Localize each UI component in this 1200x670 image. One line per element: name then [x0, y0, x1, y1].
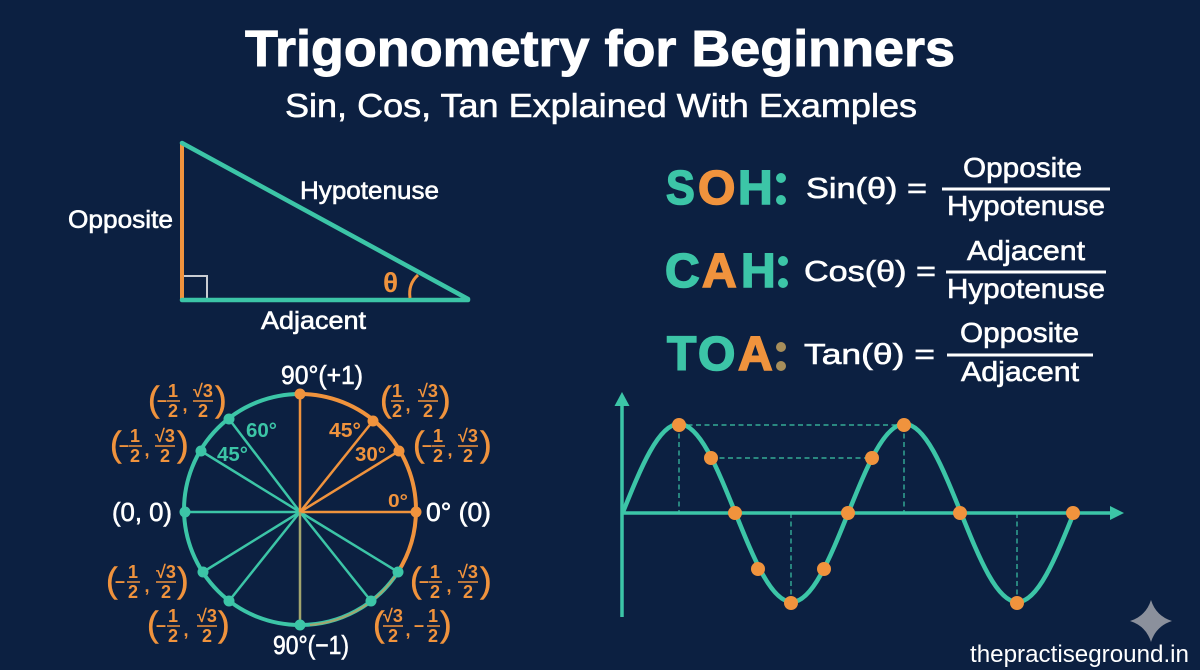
- TOA mnemonic: [667, 328, 786, 381]
- coordinate lower right outer: (: [373, 605, 385, 644]
- teal spokes: [185, 419, 398, 601]
- teal dots: [180, 414, 404, 630]
- coordinate lower left outer: 2: [202, 626, 212, 646]
- hypotenuse label: Hypotenuse: [300, 177, 439, 205]
- coordinate lower left outer: 1: [168, 606, 178, 626]
- coordinate upper left inner: –: [119, 435, 129, 455]
- coordinate upper right outer: 1: [392, 381, 402, 401]
- coordinate lower right outer: √3: [383, 606, 403, 626]
- coordinate lower left outer: –: [156, 615, 166, 635]
- TOA mnemonic: T: [667, 328, 696, 381]
- coordinate lower left inner: √3: [156, 562, 176, 582]
- teal circle arc: [184, 394, 398, 625]
- orange dots: [294, 388, 422, 518]
- SOH mnemonic: H: [738, 162, 773, 215]
- CAH mnemonic: C: [665, 245, 700, 298]
- SOH mnemonic: O: [698, 162, 735, 215]
- subtitle: Sin, Cos, Tan Explained With Examples: [285, 87, 917, 124]
- coordinate lower right outer: 2: [428, 626, 438, 646]
- cosine denominator: Hypotenuse: [947, 273, 1105, 304]
- coordinate lower right inner: ,: [446, 576, 452, 596]
- coordinate lower left inner: [106, 561, 189, 602]
- coordinate upper left inner: ): [177, 425, 189, 464]
- horizontal axis arrow: [1110, 506, 1124, 520]
- sine numerator: Opposite: [963, 152, 1082, 183]
- coordinate lower right outer: [373, 605, 452, 646]
- coordinate lower right outer: 2: [388, 626, 398, 646]
- coordinate lower left outer: (: [147, 605, 159, 644]
- top label: 90°(+1): [281, 360, 363, 390]
- vertical axis arrow: [614, 392, 630, 406]
- sine denominator: Hypotenuse: [947, 190, 1105, 221]
- coordinate upper right inner: ,: [447, 440, 453, 460]
- left label: (0, 0): [112, 497, 172, 527]
- coordinate lower left inner: 1: [128, 562, 138, 582]
- coordinate upper right outer: [380, 380, 451, 421]
- coordinate upper right inner: (: [413, 425, 425, 464]
- coordinate upper left inner: ,: [144, 440, 150, 460]
- tangent numerator: Opposite: [960, 317, 1079, 348]
- sine expression: Sin(θ) =: [806, 173, 927, 205]
- coordinate upper left outer: 2: [198, 401, 208, 421]
- cosine fraction bar: [946, 270, 1106, 274]
- coordinate upper right inner: √3: [458, 426, 478, 446]
- cosine numerator: Adjacent: [967, 235, 1085, 266]
- cosine expression: Cos(θ) =: [804, 256, 936, 288]
- bottom label: 90°(−1): [273, 630, 349, 660]
- SOH mnemonic: [666, 161, 786, 215]
- coordinate lower right inner: (: [410, 561, 422, 600]
- hypotenuse side: [182, 143, 468, 299]
- tangent expression: Tan(θ) =: [804, 339, 935, 371]
- coordinate lower left outer: 2: [168, 626, 178, 646]
- angle 60 teal: 60°: [246, 420, 277, 442]
- TOA mnemonic: A: [738, 328, 773, 381]
- coordinate lower left inner: –: [115, 571, 125, 591]
- panel: SOH formula: [666, 152, 1110, 221]
- coordinate lower left outer: [147, 605, 230, 646]
- adjacent label: Adjacent: [261, 307, 366, 335]
- icon: sparkle: [1130, 600, 1172, 642]
- coordinate upper left outer: 2: [168, 401, 178, 421]
- coordinate upper right outer: ): [439, 380, 451, 419]
- coordinate upper right outer: ,: [405, 395, 411, 415]
- vertical axis: [620, 400, 624, 617]
- coordinate lower right inner: √3: [458, 562, 478, 582]
- curve points: [672, 418, 1080, 610]
- coordinate upper right outer: √3: [418, 381, 438, 401]
- coordinate lower right inner: 1: [430, 562, 440, 582]
- CAH mnemonic: A: [702, 245, 737, 298]
- coordinate upper right outer: 2: [423, 401, 433, 421]
- coordinate lower right outer: ,: [405, 620, 411, 640]
- adjacent side: [182, 298, 468, 302]
- coordinate upper left outer: 1: [168, 381, 178, 401]
- opposite side: [180, 143, 184, 300]
- horizontal axis: [622, 511, 1115, 515]
- coordinate lower right inner: 2: [430, 582, 440, 602]
- coordinate lower right inner: 2: [463, 582, 473, 602]
- chart: sine wave: [614, 392, 1124, 617]
- coordinate upper right inner: 2: [433, 446, 443, 466]
- coordinate lower right outer: 1: [428, 606, 438, 626]
- coordinate lower left outer: √3: [197, 606, 217, 626]
- coordinate lower left inner: ): [177, 561, 189, 600]
- panel: TOA formula: [667, 317, 1093, 387]
- CAH mnemonic: [665, 245, 788, 298]
- coordinate lower left inner: 2: [128, 582, 138, 602]
- CAH mnemonic: H: [741, 245, 776, 298]
- coordinate upper right inner: –: [422, 435, 432, 455]
- right label: 0° (0): [426, 497, 491, 527]
- coordinate upper right outer: (: [380, 380, 392, 419]
- mixed lower arc: [310, 572, 398, 625]
- theta label: θ: [383, 267, 398, 298]
- panel: right triangle: [68, 143, 468, 335]
- angle 0 orange: 0°: [388, 491, 408, 511]
- panel: CAH formula: [665, 235, 1106, 304]
- coordinate upper left inner: √3: [155, 426, 175, 446]
- tangent fraction bar: [947, 354, 1093, 356]
- coordinate upper left inner: 1: [130, 426, 140, 446]
- coordinate lower right inner: –: [419, 571, 429, 591]
- coordinate lower left inner: 2: [161, 582, 171, 602]
- tangent denominator: Adjacent: [961, 356, 1079, 387]
- coordinate lower left inner: (: [106, 561, 118, 600]
- coordinate lower left outer: ): [218, 605, 230, 644]
- coordinate lower right outer: –: [414, 615, 424, 635]
- coordinate upper right inner: 2: [463, 446, 473, 466]
- orange spokes: [300, 394, 416, 512]
- coordinate lower left outer: ,: [183, 620, 189, 640]
- SOH mnemonic: S: [666, 161, 695, 215]
- coordinate upper left outer: ,: [182, 395, 188, 415]
- coordinate lower right outer: ): [440, 605, 452, 644]
- angle 30 orange: 30°: [355, 444, 386, 466]
- chart: unit circle: [106, 360, 492, 660]
- coordinate upper left outer: (: [148, 380, 160, 419]
- angle arc: [410, 275, 418, 298]
- sine curve: [623, 424, 1074, 602]
- title: Trigonometry for Beginners: [245, 20, 955, 77]
- coordinate upper right inner: 1: [433, 426, 443, 446]
- coordinate upper left outer: ): [215, 380, 227, 419]
- guide lines: [679, 425, 1017, 603]
- coordinate upper left inner: 2: [160, 446, 170, 466]
- coordinate upper right outer: 2: [392, 401, 402, 421]
- angle 45 teal: 45°: [217, 444, 248, 466]
- lower vertical spoke: [299, 512, 301, 625]
- right angle marker: [183, 276, 207, 300]
- coordinate upper left outer: [148, 380, 227, 421]
- sine fraction bar: [942, 188, 1110, 190]
- coordinate upper left outer: √3: [193, 381, 213, 401]
- coordinate lower left inner: ,: [144, 576, 150, 596]
- coordinate upper left inner: [110, 425, 189, 466]
- coordinate upper right inner: [413, 425, 492, 466]
- coordinate upper left inner: 2: [130, 446, 140, 466]
- watermark: thepractiseground.in: [970, 641, 1189, 668]
- orange circle arc: [300, 394, 416, 572]
- opposite label: Opposite: [68, 206, 173, 234]
- coordinate lower right inner: ): [480, 561, 492, 600]
- angle 45 orange: 45°: [329, 420, 361, 442]
- TOA mnemonic: O: [698, 328, 735, 381]
- coordinate upper left outer: –: [157, 390, 167, 410]
- coordinate upper right inner: ): [480, 425, 492, 464]
- coordinate lower right inner: [410, 561, 492, 602]
- coordinate upper left inner: (: [110, 425, 122, 464]
